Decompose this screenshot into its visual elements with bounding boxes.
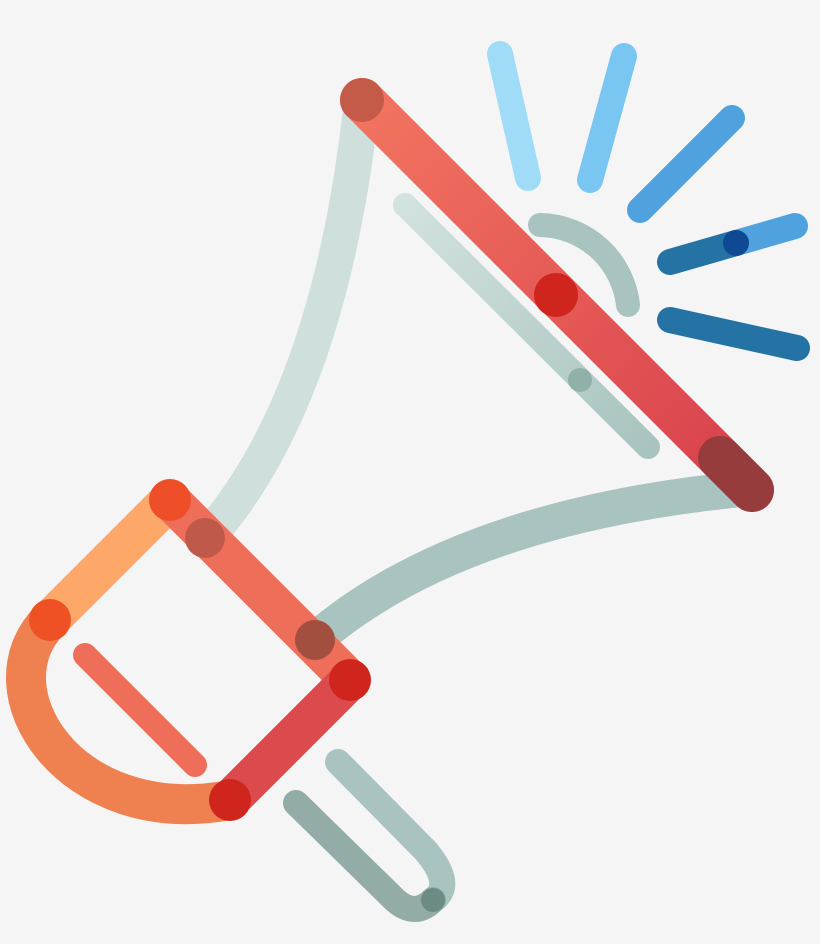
trigger <box>296 762 445 912</box>
sound rays <box>500 54 797 348</box>
handle <box>26 479 371 821</box>
cone <box>205 78 752 640</box>
